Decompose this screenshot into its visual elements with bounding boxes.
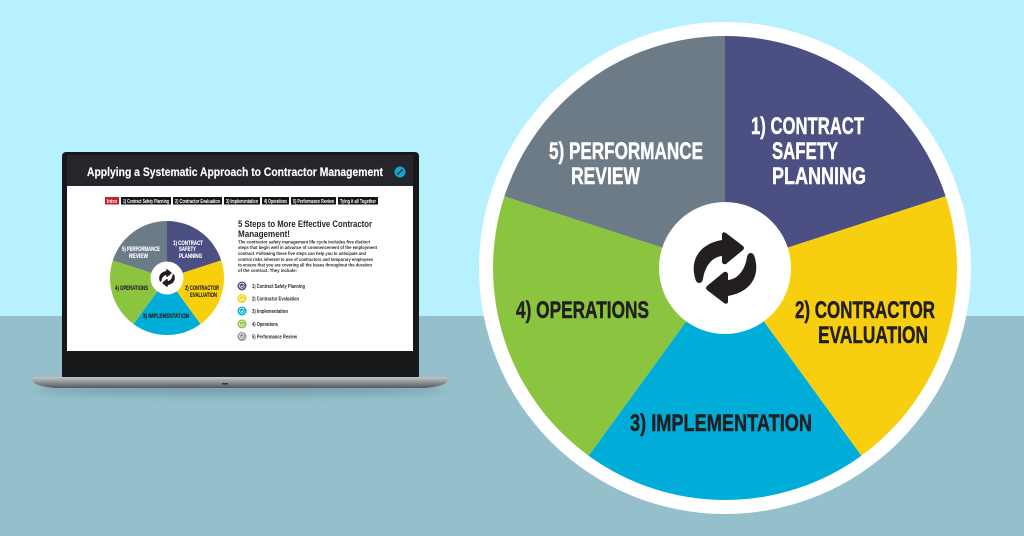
small pie labels: 2) CONTRACTOR xyxy=(185,286,219,292)
small pie chart xyxy=(110,221,224,335)
icon: refresh arrows xyxy=(694,232,756,304)
label: 4 operations: 4) OPERATIONS xyxy=(516,297,649,324)
icon: step 5 check xyxy=(238,332,246,341)
navigation tabs: 3) Implementation xyxy=(226,199,258,205)
segment: performance review xyxy=(504,36,725,268)
center hub xyxy=(659,202,791,334)
laptop base xyxy=(33,377,447,388)
small pie labels xyxy=(115,241,219,320)
label: 5 performance review: REVIEW xyxy=(571,163,640,190)
screen paragraph: control risks inherent to use of contractors and temporary employees xyxy=(238,257,373,263)
segment: implementation xyxy=(589,268,861,500)
screen title: Applying a Systematic Approach to Contractor Management xyxy=(87,167,383,179)
small pie labels: PLANNING xyxy=(179,254,202,260)
screen heading: 5 Steps to More Effective Contractor xyxy=(238,219,372,230)
label: 5 performance review: 5) PERFORMANCE xyxy=(549,138,703,165)
icon: step 3 check xyxy=(238,306,246,316)
screen paragraph: to ensure that you are covering all the bases throughout the duration xyxy=(238,262,372,268)
navigation tabs: Tying it all Together xyxy=(340,199,376,205)
laptop xyxy=(33,152,447,395)
checklist: 2) Contractor Evaluation xyxy=(252,296,299,302)
navigation tabs: Intro xyxy=(107,199,117,205)
icon: step 1 check xyxy=(238,282,246,290)
label: 1 contract safety planning: 1) CONTRACT xyxy=(751,113,864,140)
label: 2 contractor evaluation: EVALUATION xyxy=(818,322,928,349)
large pie chart xyxy=(479,22,971,514)
screen paragraph: The contractor safety management life cycle includes five distinct xyxy=(238,240,370,246)
small pie labels: 5) PERFORMANCE xyxy=(122,247,160,253)
icon: step 2 check xyxy=(238,294,246,303)
checklist: 3) Implementation xyxy=(252,309,288,315)
checklist: 4) Operations xyxy=(252,322,278,328)
screen content xyxy=(67,186,413,351)
screen paragraph: steps that begin well in advance of commencement of the employment xyxy=(238,245,377,251)
small pie labels: 1) CONTRACT xyxy=(173,241,203,247)
navigation tabs: 4) Operations xyxy=(264,199,287,205)
screen header bar xyxy=(67,155,413,186)
small pie labels: 3) IMPLEMENTATION xyxy=(143,314,189,320)
screen paragraph: of the contract. They include: xyxy=(238,268,297,274)
icon: header badge xyxy=(394,166,406,178)
navigation tabs: 2) Contractor Evaluation xyxy=(175,199,220,205)
checklist: 1) Contract Safety Planning xyxy=(252,284,305,290)
icon: step 4 check xyxy=(238,320,246,328)
label: 3 implementation: 3) IMPLEMENTATION xyxy=(630,410,812,437)
screen paragraph: contract. Following these five steps can help you to anticipate and xyxy=(238,251,366,257)
label: 1 contract safety planning: PLANNING xyxy=(772,163,866,190)
small pie labels: EVALUATION xyxy=(190,293,217,299)
segment: contractor evaluation xyxy=(725,196,957,456)
small pie labels: 4) OPERATIONS xyxy=(115,286,148,292)
segment: operations xyxy=(493,196,725,456)
label: 5 performance review xyxy=(549,138,703,190)
icon: small refresh arrows xyxy=(159,269,175,287)
small pie labels: SAFETY xyxy=(179,247,196,253)
label: 1 contract safety planning: SAFETY xyxy=(772,138,838,165)
checklist xyxy=(238,282,305,341)
navigation tabs: 1) Contract Safety Planning xyxy=(123,199,169,205)
label: 2 contractor evaluation: 2) CONTRACTOR xyxy=(795,297,935,324)
screen heading xyxy=(238,219,372,240)
screen heading: Management! xyxy=(238,229,290,240)
small pie labels: REVIEW xyxy=(129,254,148,260)
label: 2 contractor evaluation xyxy=(795,297,935,349)
screen paragraph xyxy=(238,240,377,274)
navigation tabs xyxy=(105,197,378,205)
segment: contract safety planning xyxy=(725,36,946,268)
checklist: 5) Performance Review xyxy=(252,334,297,340)
navigation tabs: 5) Performance Review xyxy=(293,199,334,205)
laptop bezel xyxy=(62,152,419,380)
label: 1 contract safety planning xyxy=(751,113,866,190)
